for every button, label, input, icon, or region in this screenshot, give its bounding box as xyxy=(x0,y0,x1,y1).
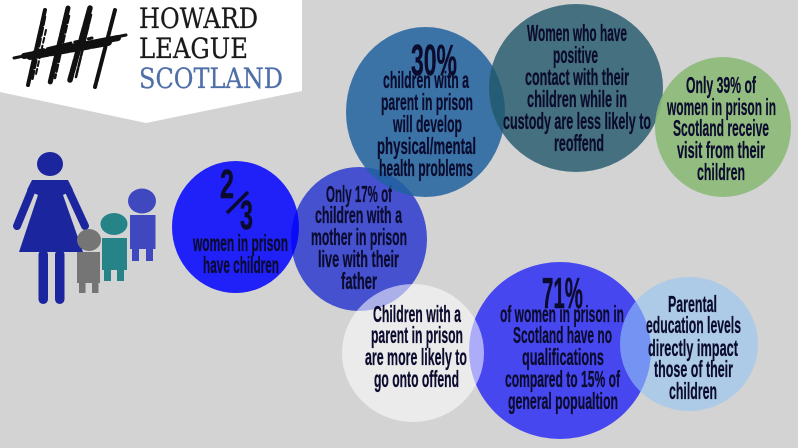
panel: 30% health problems xyxy=(346,27,505,197)
icon: tally marks xyxy=(14,8,126,87)
panel: 71% no qualifications xyxy=(469,262,651,439)
panel: 30% health problems: children with a xyxy=(383,67,469,93)
panel: 17% live with father: live with their xyxy=(318,246,399,272)
panel: positive contact: custody are less likely to xyxy=(503,108,651,134)
panel: 39% receive visits: children xyxy=(697,159,745,185)
icon: mother and three children xyxy=(17,152,156,304)
panel: 39% receive visits xyxy=(655,57,791,197)
panel: two thirds have children xyxy=(172,161,299,293)
panel: 17% live with father xyxy=(291,167,427,311)
panel: 71% no qualifications: 71% xyxy=(542,269,583,318)
panel: parental education: Parental xyxy=(668,291,717,317)
icon: mother xyxy=(17,152,85,304)
panel: more likely to offend: Children with a xyxy=(373,301,461,327)
panel: 71% no qualifications: general popualtion xyxy=(508,388,618,414)
logo wordmark xyxy=(139,2,283,95)
panel: more likely to offend: go onto offend xyxy=(374,366,459,392)
panel: positive contact: positive xyxy=(553,42,598,68)
panel: parental education xyxy=(620,277,758,411)
panel: positive contact: Women who have xyxy=(527,20,627,46)
fraction 2/3 xyxy=(220,161,253,238)
panel: 17% live with father: father xyxy=(341,268,377,294)
icon: grey child xyxy=(77,229,101,293)
panel: 71% no qualifications: Scotland have no xyxy=(513,322,612,348)
panel: 71% no qualifications: qualifications xyxy=(522,344,604,370)
panel: more likely to offend: are more likely to xyxy=(365,344,467,370)
logo wordmark: HOWARD xyxy=(139,2,258,35)
logo wordmark: SCOTLAND xyxy=(139,62,283,95)
statistic 30%: 30% xyxy=(411,36,457,85)
panel: 30% health problems: physical/mental xyxy=(377,133,476,159)
logo wordmark: LEAGUE xyxy=(139,32,248,65)
panel: 17% live with father: Only 17% of xyxy=(326,181,392,207)
panel: parental education: children xyxy=(669,378,717,404)
icon: blue child xyxy=(128,188,156,261)
panel: positive contact: reoffend xyxy=(554,130,604,156)
panel: 71% no qualifications: of women in prison in xyxy=(500,301,624,327)
panel: positive contact xyxy=(489,4,663,172)
panel: more likely to offend: parent in prison xyxy=(371,322,463,348)
logo banner xyxy=(0,0,302,123)
panel: more likely to offend xyxy=(342,284,484,422)
panel: parental education: those of their xyxy=(654,356,733,382)
panel: 30% health problems: will develop xyxy=(392,111,462,137)
panel: two thirds have children: have children xyxy=(203,252,279,278)
panel: 71% no qualifications: compared to 15% of xyxy=(505,366,620,392)
panel: 30% health problems: parent in prison xyxy=(381,89,473,115)
icon: teal child xyxy=(100,213,128,281)
panel: two thirds have children: women in prison xyxy=(192,230,288,256)
fraction 2/3: 2 xyxy=(220,161,234,207)
fraction 2/3: 3 xyxy=(240,192,253,238)
panel: 17% live with father: children with a xyxy=(315,202,402,228)
panel: 30% health problems: health problems xyxy=(379,155,473,181)
panel: 17% live with father: mother in prison xyxy=(311,224,407,250)
panel: positive contact: contact with their xyxy=(525,64,629,90)
panel: positive contact: children while in xyxy=(527,86,627,112)
